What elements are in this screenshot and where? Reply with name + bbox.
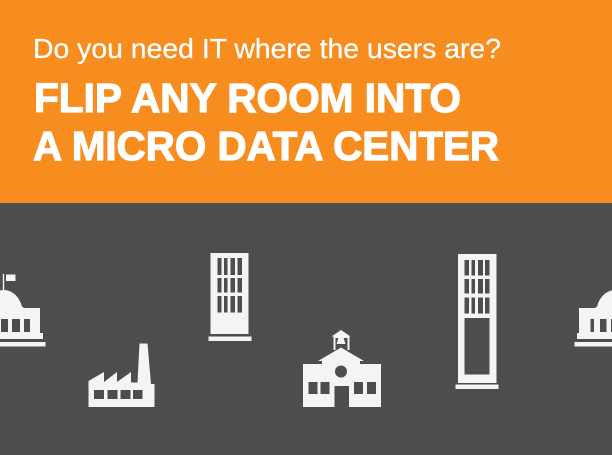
subtitle question: Do you need IT where the users are?	[33, 33, 501, 64]
icon: server rack tall	[456, 254, 498, 389]
title heading	[33, 75, 499, 169]
icon: government building left	[0, 274, 46, 346]
icon: school	[303, 330, 381, 407]
icon: server rack short	[208, 253, 252, 341]
title heading: A MICRO DATA CENTER	[33, 123, 499, 169]
panel: dark building scene	[0, 203, 612, 455]
title heading: FLIP ANY ROOM INTO	[34, 75, 461, 121]
icon: government building right	[574, 290, 612, 346]
icon: factory	[88, 344, 154, 407]
panel: orange header	[0, 0, 612, 203]
